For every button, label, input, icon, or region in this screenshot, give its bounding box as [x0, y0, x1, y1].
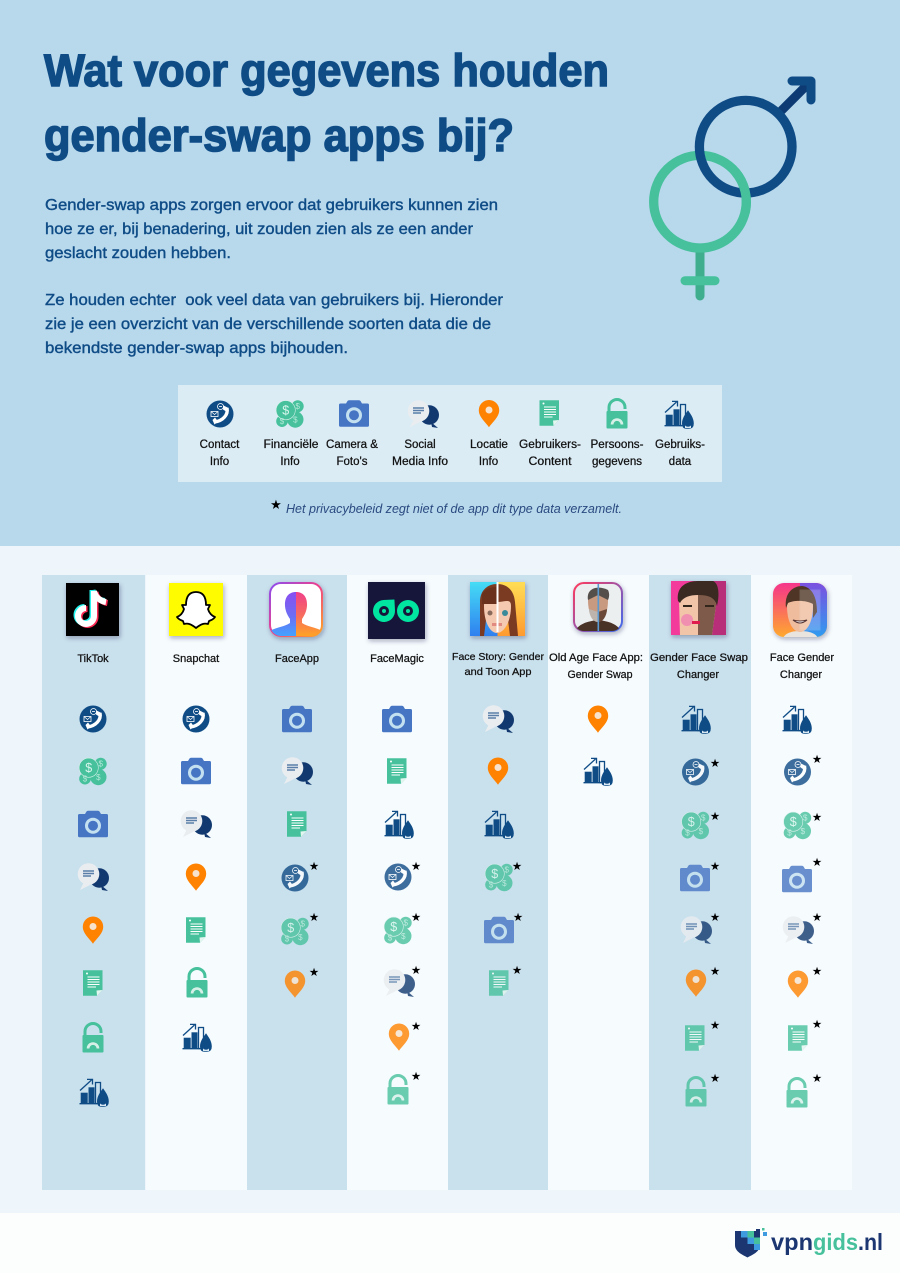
footnote: ★	[270, 498, 282, 513]
icon: personal data, not stated: ★	[411, 1069, 421, 1083]
legend: financial info: Financiële	[264, 439, 318, 451]
icon: usage data	[782, 706, 812, 734]
lower section background	[0, 546, 900, 1213]
icon: user content	[83, 970, 102, 996]
app name: Face Gender Changer: Changer	[780, 669, 822, 681]
intro text block: Ze houden echter ook veel data van gebruikers bij. Hieronder	[45, 292, 504, 309]
icon: location, not stated: ★	[812, 964, 822, 978]
icon: FaceApp logo	[268, 583, 324, 638]
app name: Snapchat: Snapchat	[173, 653, 219, 665]
app name: Face Gender Changer	[770, 652, 834, 681]
icon: personal data, not stated: ★	[710, 1071, 720, 1085]
app name: Old Age Face App: Old Age Face App:	[549, 652, 643, 664]
panel: legend	[178, 385, 722, 482]
column: TikTok	[66, 583, 119, 1107]
legend: user content	[519, 400, 581, 468]
app name: Gender Face Swap Changer: Gender Face Swap	[650, 652, 748, 664]
icon: contact info, not stated	[682, 756, 720, 786]
icon: interlocked gender symbols	[654, 81, 811, 296]
icon: user content	[186, 917, 206, 943]
icon: Old Age Face App logo	[574, 583, 622, 632]
icon: usage data	[682, 706, 711, 734]
logo: vpngids.nl	[735, 1228, 883, 1258]
icon: personal data, not stated: ★	[812, 1071, 822, 1085]
icon: location, not stated	[285, 965, 319, 998]
icon: usage data	[484, 811, 514, 839]
icon: camera	[282, 706, 312, 732]
icon: camera, not stated	[484, 910, 523, 943]
icon: personal data, not stated	[686, 1071, 720, 1106]
icon: contact info, not stated: ★	[710, 756, 720, 770]
app name: Face Gender Changer: Face Gender	[770, 652, 834, 664]
icon: usage data	[584, 758, 613, 786]
icon: personal data, not stated	[786, 1071, 822, 1108]
icon: social media, not stated	[384, 963, 421, 997]
legend: financial info: Info	[280, 456, 300, 468]
icon: financial info, not stated	[682, 809, 720, 839]
icon: financial info	[79, 758, 107, 785]
icon: user content, not stated	[489, 963, 522, 996]
legend: contact info	[200, 400, 240, 468]
icon: contact info	[182, 706, 210, 732]
icon: shield	[735, 1228, 767, 1258]
legend: location info: Info	[479, 456, 498, 468]
wordmark: .nl	[858, 1229, 883, 1255]
icon: contact info, not stated	[282, 859, 319, 892]
intro text block: hoe ze er, bij benadering, uit zouden zien als ze een ander	[45, 221, 474, 238]
icon: social media, not stated: ★	[411, 963, 421, 977]
icon: usage data	[182, 1024, 212, 1052]
column: FaceApp	[268, 583, 324, 998]
icon: financial info, not stated: ★	[309, 910, 319, 924]
legend: user content: Content	[528, 456, 572, 468]
icon: location	[186, 864, 206, 891]
app name: TikTok: TikTok	[77, 653, 109, 665]
icon: Face Story logo	[470, 582, 525, 636]
icon: user content	[387, 758, 406, 784]
column: FaceMagic	[368, 582, 425, 1104]
icon: financial info, not stated: ★	[812, 810, 822, 824]
legend: contact info: Info	[210, 456, 229, 468]
wordmark: gids	[813, 1229, 858, 1255]
icon: camera, not stated: ★	[710, 859, 720, 873]
icon: camera	[382, 706, 412, 732]
app name: Gender Face Swap Changer	[650, 652, 748, 681]
legend: user content: Gebruikers-	[519, 439, 581, 451]
intro text block: bekendste gender-swap apps bijhouden.	[45, 340, 348, 357]
title: Wat voor gegevens houden	[44, 45, 609, 96]
icon: contact info	[80, 706, 106, 732]
icon: location, not stated: ★	[411, 1019, 421, 1033]
icon: financial info, not stated: ★	[411, 910, 421, 924]
legend: personal data: Persoons-	[590, 439, 644, 451]
icon: social media, not stated: ★	[710, 910, 720, 924]
app name: Old Age Face App	[549, 652, 643, 681]
icon: personal data	[186, 968, 208, 998]
legend: personal data	[590, 400, 644, 468]
icon: financial info, not stated: ★	[512, 859, 522, 873]
icon: user content, not stated: ★	[812, 1017, 822, 1031]
wordmark	[771, 1229, 883, 1255]
app name: Old Age Face App: Gender Swap	[568, 669, 632, 681]
icon: social media	[282, 757, 313, 785]
icon: location, not stated: ★	[710, 964, 720, 978]
icon: location, not stated	[686, 964, 720, 997]
legend: location info	[470, 400, 508, 468]
icon: user content, not stated: ★	[512, 963, 522, 977]
icon: social media, not stated	[681, 910, 720, 944]
intro text block	[45, 197, 504, 357]
title: gender-swap apps bij?	[44, 110, 514, 161]
icon: location	[83, 916, 103, 944]
icon: Face Gender Changer logo	[773, 583, 827, 638]
app name: Gender Face Swap Changer: Changer	[677, 669, 719, 681]
icon: usage data	[384, 811, 414, 839]
icon: location, not stated	[788, 964, 822, 998]
legend: social media info	[392, 400, 448, 468]
icon: TikTok logo	[66, 583, 119, 636]
icon: contact info, not stated: ★	[309, 859, 319, 873]
legend: personal data: gegevens	[592, 456, 642, 468]
legend: camera and photos: Foto's	[337, 456, 368, 468]
intro text block: zie je een overzicht van de verschillende soorten data die de	[45, 316, 491, 333]
legend: contact info: Contact	[200, 439, 240, 451]
icon: financial info, not stated: ★	[710, 809, 720, 823]
icon: personal data	[82, 1024, 104, 1052]
title	[44, 45, 609, 161]
icon: camera, not stated: ★	[812, 855, 822, 869]
intro text block: geslacht zouden hebben.	[45, 245, 231, 262]
footnote: Het privacybeleid zegt niet of de app dit type data verzamelt.	[286, 502, 622, 516]
header background	[0, 0, 900, 546]
icon: camera, not stated	[782, 855, 822, 892]
wordmark: vpn	[771, 1229, 813, 1255]
icon: social media, not stated	[783, 910, 822, 944]
icon: Gender Face Swap logo	[671, 581, 726, 635]
intro text block: Gender-swap apps zorgen ervoor dat gebruikers kunnen zien	[45, 197, 498, 214]
legend: usage data: data	[669, 456, 692, 468]
icon: contact info, not stated	[784, 752, 822, 786]
column: Old Age Face App	[549, 583, 643, 786]
icon: location, not stated	[389, 1019, 421, 1051]
footer background	[0, 1213, 900, 1273]
icon: contact info, not stated: ★	[411, 859, 421, 873]
app name: Face Story	[452, 651, 545, 678]
icon: financial info, not stated	[485, 859, 522, 891]
column: Gender Face Swap Changer	[650, 581, 748, 1106]
icon: user content, not stated	[685, 1018, 720, 1051]
icon: contact info, not stated: ★	[812, 752, 822, 766]
icon: Snapchat logo	[169, 583, 223, 636]
icon: social media, not stated: ★	[812, 910, 822, 924]
icon: camera, not stated	[680, 859, 720, 891]
app name: Face Story: Face Story: Gender	[452, 651, 545, 663]
icon: user content, not stated	[788, 1017, 822, 1051]
icon: financial info, not stated	[281, 910, 319, 945]
icon: personal data, not stated	[388, 1069, 421, 1104]
icon: location	[488, 758, 508, 785]
icon: contact info, not stated	[384, 859, 421, 890]
legend: camera and photos: Camera &	[326, 439, 378, 451]
legend: social media info: Media Info	[392, 456, 448, 468]
icon: camera	[78, 811, 108, 837]
legend: location info: Locatie	[470, 439, 508, 451]
icon: location, not stated: ★	[309, 965, 319, 979]
column backgrounds	[42, 575, 852, 1190]
icon: user content	[287, 811, 306, 837]
icon: location	[588, 706, 608, 733]
legend: usage data	[655, 401, 705, 468]
icon: FaceMagic logo	[368, 582, 425, 639]
column: Snapchat	[169, 583, 223, 1052]
app name: FaceMagic: FaceMagic	[370, 653, 424, 665]
app name: FaceApp: FaceApp	[275, 653, 319, 665]
icon: usage data	[80, 1079, 109, 1107]
icon: social media	[78, 863, 109, 891]
legend: usage data: Gebruiks-	[655, 439, 705, 451]
icon: social media	[483, 705, 514, 733]
icon: camera, not stated: ★	[513, 910, 523, 924]
icon: user content, not stated: ★	[710, 1018, 720, 1032]
icon: camera	[181, 758, 211, 784]
icon: social media	[181, 810, 212, 838]
legend: financial info	[264, 400, 318, 468]
icon: financial info, not stated	[784, 810, 822, 839]
legend: camera and photos	[326, 400, 378, 468]
column: Face Gender Changer	[770, 583, 834, 1108]
icon: financial info, not stated	[384, 910, 421, 944]
app name: Face Story: and Toon App	[464, 666, 532, 678]
column: Face Story	[452, 582, 545, 996]
legend: social media info: Social	[404, 439, 436, 451]
